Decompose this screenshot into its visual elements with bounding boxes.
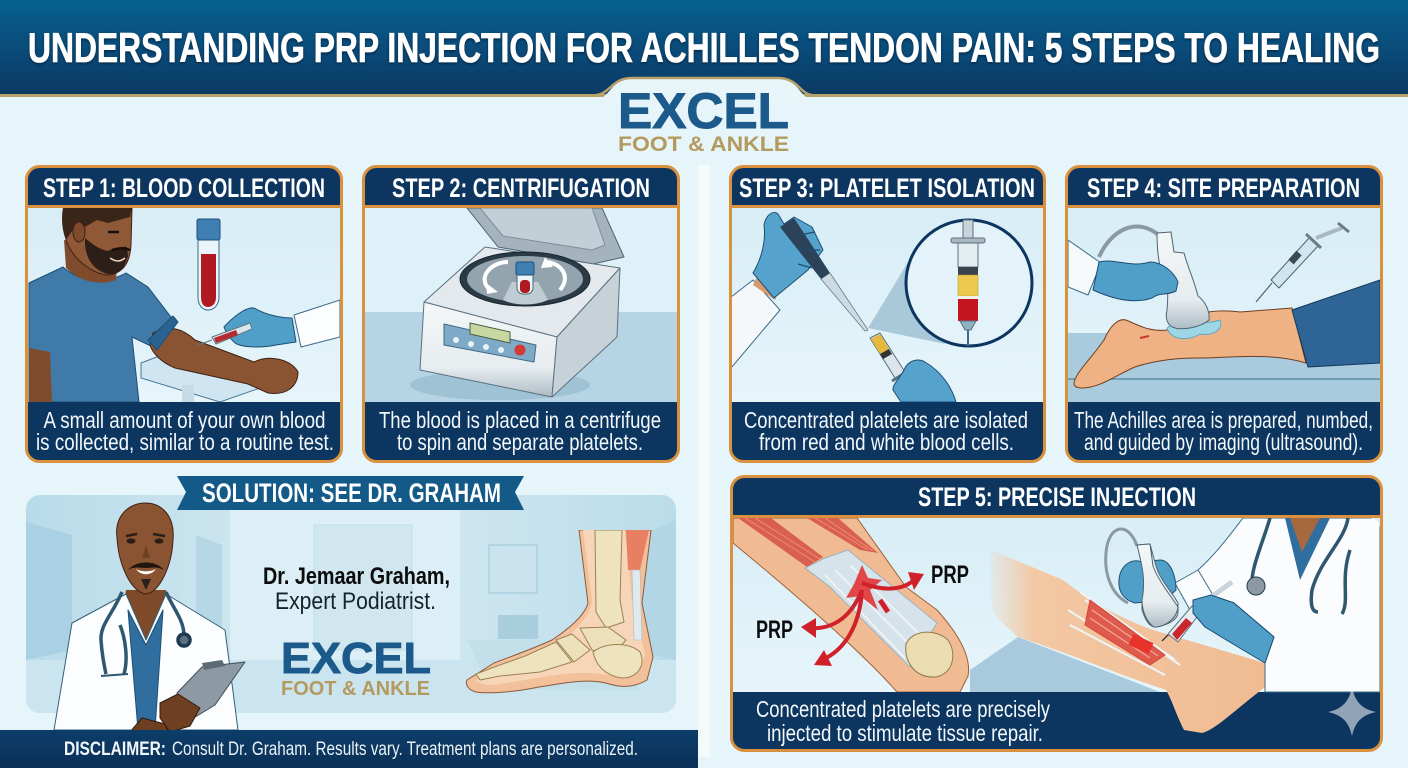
heading: step 3: STEP 3: PLATELET ISOLATION [739, 173, 1035, 203]
doctor name and role [263, 563, 450, 615]
panel: step 3 platelet isolation [730, 166, 1044, 462]
caption: step 2: The blood is placed in a centrifuge [379, 407, 661, 433]
doctor name and role: Expert Podiatrist. [275, 588, 436, 615]
doctor head [117, 503, 173, 594]
illustration: centrifuge [410, 208, 624, 400]
caption: step 3 [744, 407, 1028, 455]
logo: Excel Foot & Ankle: EXCEL [618, 83, 789, 139]
illustration: tendon anatomy with PRP arrows [733, 518, 1160, 692]
disclaimer bar: DISCLAIMER: [64, 739, 166, 760]
caption: step 5 [756, 696, 1050, 746]
disclaimer bar [0, 730, 698, 768]
illustration: doctor injecting ankle [991, 518, 1380, 733]
gloved hand with pipette [753, 212, 868, 331]
ribbon heading: SOLUTION: SEE DR. GRAHAM [202, 478, 501, 508]
panel: step 1 blood collection [26, 166, 342, 462]
doctor name and role: Dr. Jemaar Graham, [263, 563, 450, 590]
illustration: ultrasound on leg [1068, 223, 1380, 388]
caption: step 2 [379, 407, 661, 455]
tendon streaks [1068, 592, 1180, 675]
heading: step 2: STEP 2: CENTRIFUGATION [392, 173, 650, 203]
heading: step 1: STEP 1: BLOOD COLLECTION [43, 173, 325, 203]
caption: step 3: from red and white blood cells. [759, 429, 1014, 455]
probe hand [1119, 560, 1176, 603]
panel: solution see Dr. Graham [26, 476, 676, 732]
heading: step 5: STEP 5: PRECISE INJECTION [918, 482, 1196, 512]
caption: step 4 [1074, 407, 1373, 455]
injecting hand [1193, 595, 1274, 663]
caption: step 1 [36, 407, 334, 455]
logo: Excel Foot & Ankle secondary: FOOT & ANKLE [281, 678, 430, 700]
icon: sparkle watermark [1328, 687, 1376, 736]
column divider strip [698, 165, 710, 757]
syringe [1162, 634, 1169, 642]
caption: step 3: Concentrated platelets are isolated [744, 407, 1028, 433]
panel: step 5 precise injection [732, 476, 1382, 750]
caption: step 5: Concentrated platelets are precisely [756, 696, 1050, 722]
caption: step 1: is collected, similar to a routine test. [36, 429, 334, 455]
panel: step 2 centrifugation [364, 166, 678, 462]
label: PRP upper: PRP [931, 561, 969, 589]
logo: Excel Foot & Ankle: FOOT & ANKLE [618, 133, 789, 156]
logo: Excel Foot & Ankle secondary: EXCEL [281, 634, 431, 683]
ultrasound probe [1157, 232, 1209, 329]
ribbon heading [177, 476, 524, 510]
clinic background [26, 495, 676, 713]
label: PRP lower: PRP [756, 616, 793, 644]
blood tube [197, 219, 220, 310]
header banner [0, 0, 1408, 100]
panel: step 4 site preparation [1066, 166, 1382, 462]
caption: step 2: to spin and separate platelets. [397, 429, 643, 455]
gloved hand [1093, 261, 1178, 301]
disclaimer bar: Consult Dr. Graham. Results vary. Treatment plans are personalized. [172, 739, 638, 760]
caption: step 5: injected to stimulate tissue repair. [767, 720, 1043, 746]
doctor portrait [54, 503, 245, 732]
foot anatomy illustration [466, 530, 653, 693]
stethoscope [101, 592, 190, 676]
patient head [62, 208, 132, 275]
caption: step 1: A small amount of your own blood [44, 407, 326, 433]
illustration: patient giving blood [29, 208, 340, 403]
illustration: pipette and syringe [731, 212, 1032, 402]
